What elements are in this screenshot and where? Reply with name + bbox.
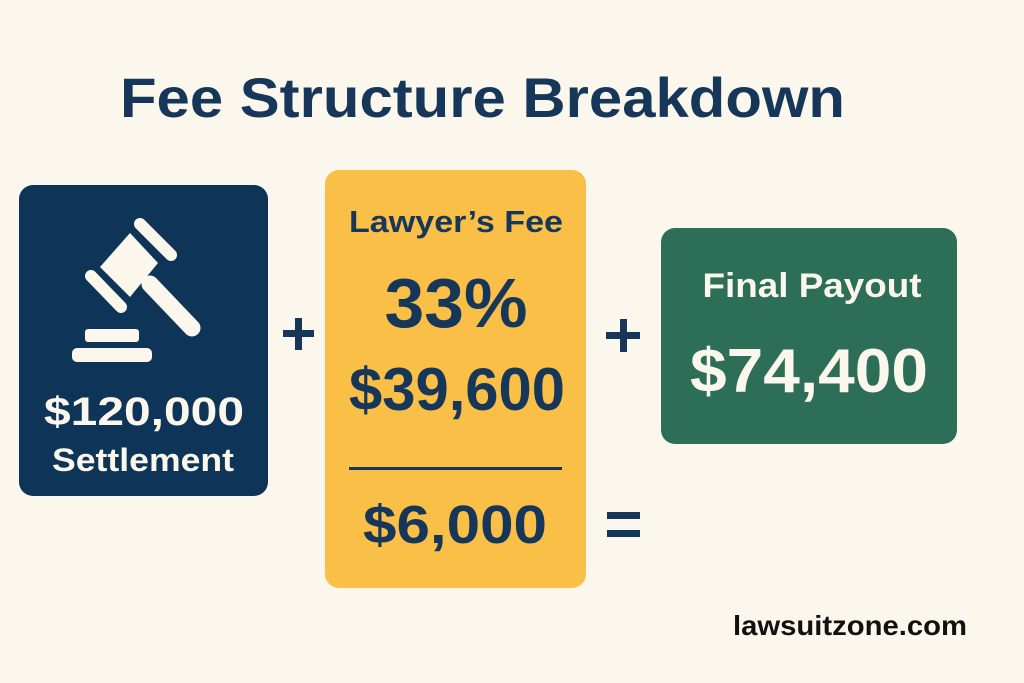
footer: website: lawsuitzone.com — [733, 610, 967, 641]
plus sign 1 — [283, 318, 314, 350]
equals sign — [607, 512, 640, 537]
fee label: Lawyer’s Fee — [349, 204, 563, 239]
percentage: 33% — [384, 264, 528, 342]
plus sign 2 — [606, 319, 640, 352]
payout amount: $74,400 — [690, 337, 928, 406]
fee amount: $39,600 — [349, 356, 565, 423]
icon: gavel — [72, 224, 192, 362]
panel: final payout — [661, 228, 957, 444]
title: Fee Structure Breakdown — [120, 66, 845, 129]
settlement label: Settlement — [52, 442, 234, 478]
payout label: Final Payout — [702, 267, 922, 305]
settlement amount: $120,000 — [44, 390, 244, 434]
panel: lawyer fee — [325, 170, 586, 588]
costs amount: $6,000 — [363, 495, 547, 555]
panel: settlement — [19, 185, 268, 496]
